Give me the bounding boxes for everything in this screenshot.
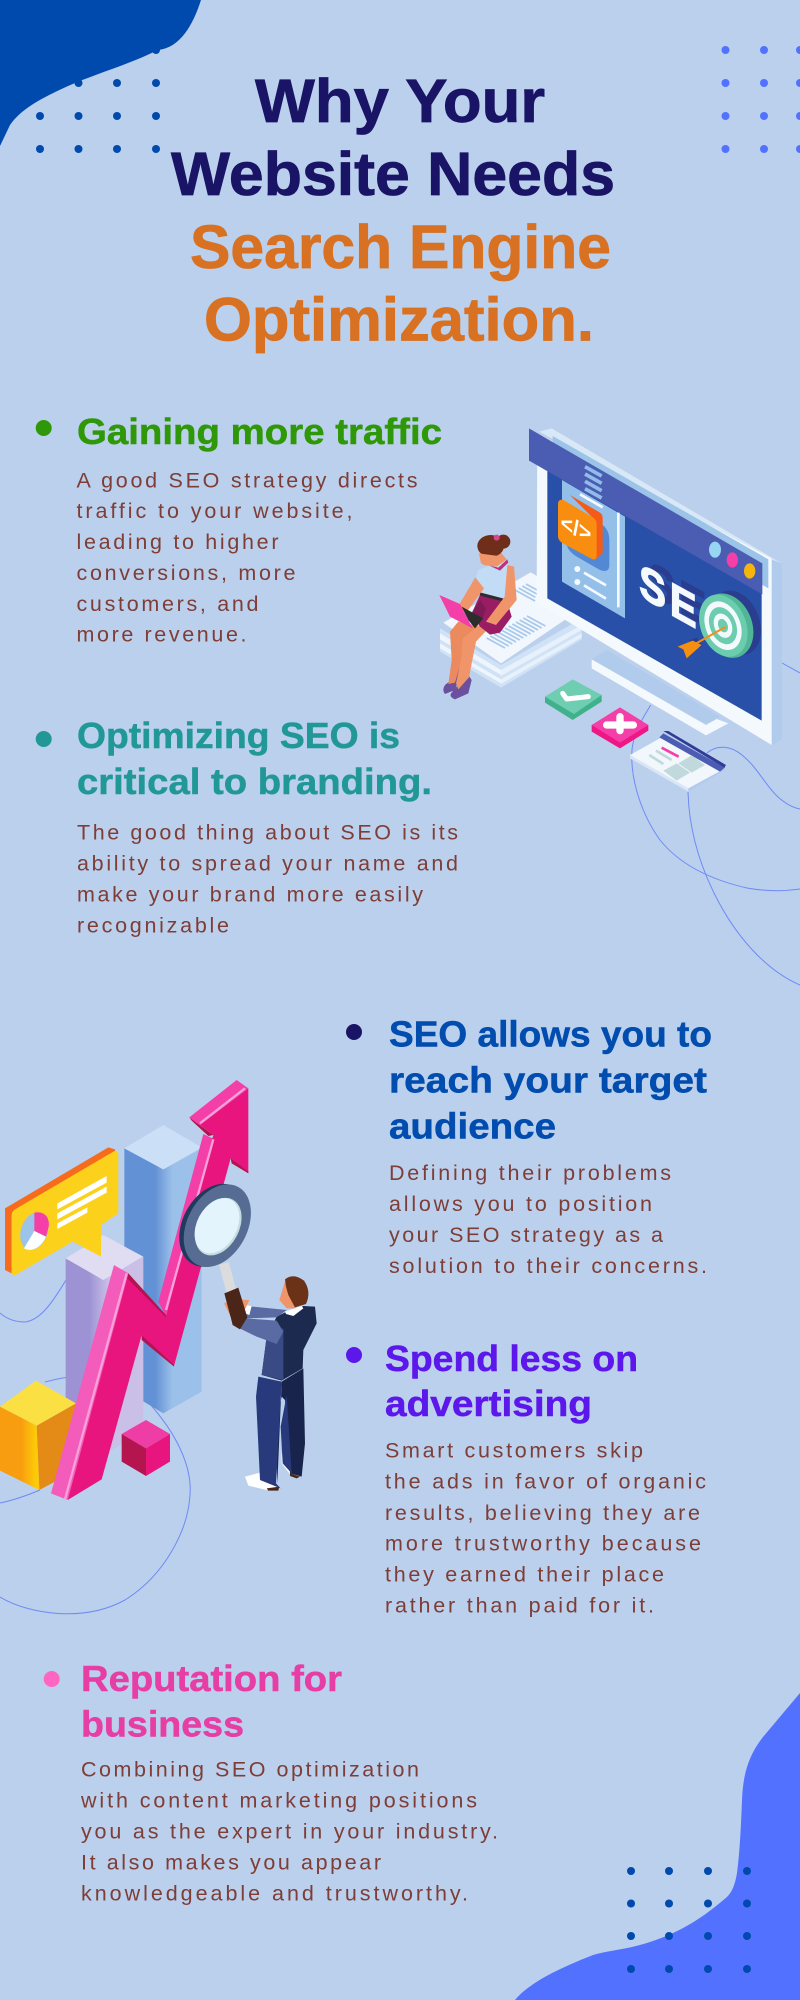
SEO lettering: S [639, 553, 666, 620]
decorative blob: bottom right [515, 1693, 800, 2000]
body text: advertising: more trustworthy because [385, 1532, 701, 1556]
icon: check tile [545, 679, 602, 720]
body text: gaining more traffic: leading to higher [76, 530, 278, 554]
body text: gaining more traffic: more revenue. [76, 622, 246, 646]
title: Optimization. [204, 286, 594, 354]
body text: gaining more traffic: traffic to your website, [76, 499, 352, 523]
heading: advertising: Spend less on [385, 1338, 638, 1379]
body text: gaining more traffic: customers, and [76, 592, 258, 616]
pink rising arrow [51, 1080, 248, 1500]
heading: reputation: Reputation for [81, 1658, 342, 1699]
bullet: violet [346, 1347, 362, 1363]
illustration: growth chart with man [0, 1080, 317, 1500]
body text: branding: The good thing about SEO is its [77, 820, 458, 844]
heading: target audience: audience [389, 1105, 556, 1146]
dot grid: top right [722, 46, 800, 153]
icon: target with arrow [678, 583, 770, 666]
icon: code tile: </> [561, 510, 591, 548]
body text: reputation: It also makes you appear [81, 1851, 381, 1875]
bullet: navy [346, 1024, 362, 1040]
section: target audience [346, 1014, 712, 1278]
body text: advertising [385, 1439, 706, 1618]
body text: gaining more traffic: conversions, more [76, 561, 296, 585]
body text: reputation: Combining SEO optimization [81, 1758, 419, 1782]
purple bar [66, 1235, 143, 1453]
sidebar panel [562, 467, 625, 618]
body text: reputation: you as the expert in your industry. [81, 1820, 498, 1844]
monitor stand [592, 650, 728, 735]
SEO lettering: S [649, 550, 675, 618]
heading: branding: Optimizing SEO is [77, 715, 400, 756]
man in suit [224, 1276, 317, 1491]
dot grid: bottom right [627, 1867, 751, 1973]
window buttons [709, 542, 755, 579]
body text: gaining more traffic [76, 468, 418, 646]
section: gaining more traffic [36, 411, 442, 646]
SEO lettering: E [679, 569, 706, 636]
body text: reputation: with content marketing positions [80, 1789, 477, 1813]
body text: gaining more traffic: A good SEO strategy directs [76, 468, 418, 492]
body text: branding [77, 820, 458, 937]
heading: advertising [385, 1338, 638, 1424]
magnifying glass [166, 1172, 264, 1295]
icon: cross tile [592, 707, 648, 748]
body text: advertising: the ads in favor of organic [385, 1470, 706, 1494]
section: reputation [44, 1658, 498, 1906]
body text: reputation: knowledgeable and trustworthy. [81, 1882, 468, 1906]
pink cube [122, 1420, 170, 1476]
heading: gaining more traffic: Gaining more traffic [77, 411, 442, 452]
heading: target audience: SEO allows you to [389, 1014, 712, 1055]
title: Search Engine [190, 213, 611, 281]
section: branding [36, 715, 458, 937]
heading: branding: critical to branding. [77, 761, 432, 802]
bullet: green [36, 420, 52, 436]
heading: branding [77, 715, 432, 802]
bullet: teal [36, 731, 52, 747]
body text: target audience: your SEO strategy as a [389, 1223, 663, 1247]
small web page card [630, 731, 726, 792]
title: Why Your [255, 67, 545, 135]
chat bubble with pie chart [5, 1147, 118, 1275]
body text: branding: recognizable [77, 913, 229, 937]
SEO lettering: E [670, 571, 696, 639]
heading: target audience [389, 1014, 712, 1146]
heading: reputation [81, 1658, 342, 1745]
body text: advertising: results, believing they are [385, 1501, 700, 1525]
icon: code tile [558, 495, 603, 560]
blue bar [124, 1125, 202, 1413]
monitor [529, 428, 782, 745]
thin curved lines: left side [0, 1280, 190, 1614]
illustration: SEO monitor with woman [439, 428, 782, 792]
body text: advertising: they earned their place [385, 1563, 664, 1587]
title: Website Needs [171, 140, 615, 208]
section: advertising [346, 1338, 706, 1618]
paper stack [440, 572, 587, 688]
decorative blob: top left [0, 0, 201, 146]
body text: branding: make your brand more easily [77, 882, 423, 906]
heading: target audience: reach your target [389, 1060, 707, 1101]
heading: advertising: advertising [385, 1383, 592, 1424]
body text: branding: ability to spread your name and [77, 852, 458, 876]
body text: reputation [80, 1758, 498, 1906]
heading: reputation: business [81, 1704, 244, 1745]
dot grid: top left [36, 46, 160, 153]
body text: target audience [389, 1161, 707, 1278]
thin curved lines: right side [632, 663, 800, 985]
yellow cube [0, 1381, 76, 1490]
body text: target audience: Defining their problems [389, 1161, 671, 1185]
title [171, 67, 615, 354]
SEO lettering [639, 550, 706, 639]
bullet: pink [44, 1671, 60, 1687]
woman with laptop [439, 535, 517, 699]
body text: target audience: solution to their concerns. [389, 1254, 707, 1278]
body text: advertising: rather than paid for it. [385, 1594, 654, 1618]
body text: advertising: Smart customers skip [385, 1439, 643, 1463]
body text: target audience: allows you to position [389, 1192, 652, 1216]
